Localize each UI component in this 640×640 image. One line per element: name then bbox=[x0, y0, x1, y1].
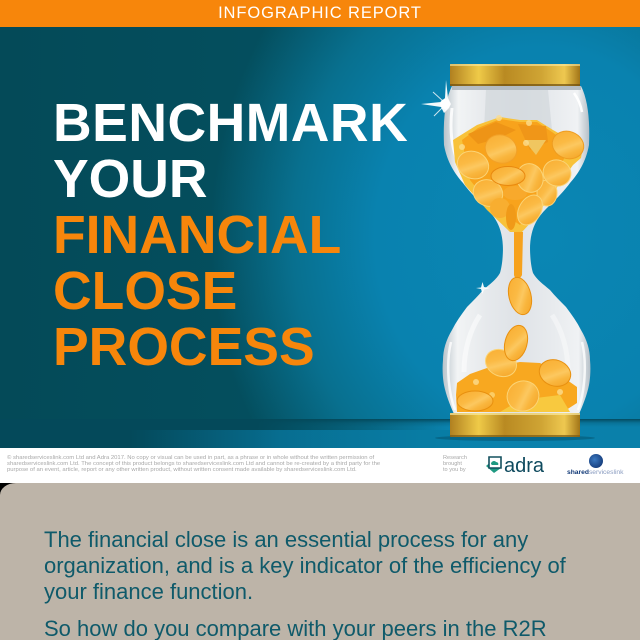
white footer strip bbox=[0, 448, 640, 483]
copyright text: © sharedserviceslink.com Ltd and Adra 2017. No copy or visual can be used in part, as a phrase or in whole without the written permission of bbox=[7, 455, 374, 461]
coin pile: upper bbox=[453, 115, 588, 279]
title: FINANCIAL bbox=[53, 206, 341, 265]
title: PROCESS bbox=[53, 318, 315, 377]
research credit bbox=[443, 455, 467, 473]
coin pile: lower bbox=[456, 323, 577, 416]
title: BENCHMARK bbox=[53, 94, 408, 153]
banner floor glow bbox=[130, 430, 460, 448]
research credit: brought bbox=[443, 461, 462, 467]
falling coin bbox=[505, 275, 535, 317]
research credit: Research bbox=[443, 455, 467, 461]
intro text: The financial close is an essential process for any bbox=[44, 527, 528, 552]
copyright text bbox=[7, 455, 380, 473]
top bar: report label: INFOGRAPHIC REPORT bbox=[218, 4, 422, 22]
banner floor bbox=[0, 419, 640, 448]
research credit: to you by bbox=[443, 467, 466, 473]
icon: sparkle bbox=[421, 80, 490, 294]
hero banner background bbox=[0, 27, 640, 448]
title bbox=[53, 94, 408, 377]
logo: sharedserviceslink bbox=[567, 454, 624, 476]
copyright text: sharedserviceslink.com Ltd. The concept of this product belongs to sharedserviceslink.com Ltd and cannot be re-created by a third party for the bbox=[7, 461, 380, 467]
top bar: report label bbox=[0, 0, 640, 27]
intro text bbox=[44, 527, 566, 640]
bottom gold base bbox=[435, 413, 595, 441]
copyright text: purpose of an event, article, report or any other written product, without written consent made available by sharedserviceslink.com Ltd. bbox=[7, 467, 357, 473]
logo: sharedserviceslink: sharedserviceslink bbox=[567, 469, 624, 476]
title: CLOSE bbox=[53, 262, 237, 321]
intro panel bbox=[0, 483, 640, 640]
title: YOUR bbox=[53, 150, 208, 209]
intro text: your finance function. bbox=[44, 579, 253, 604]
lower glass bulb bbox=[443, 245, 590, 414]
intro text: organization, and is a key indicator of the efficiency of bbox=[44, 553, 566, 578]
logo: adra bbox=[486, 455, 544, 477]
upper glass bulb bbox=[444, 86, 589, 250]
top gold lid bbox=[450, 64, 580, 86]
logo: adra: adra bbox=[504, 455, 544, 477]
